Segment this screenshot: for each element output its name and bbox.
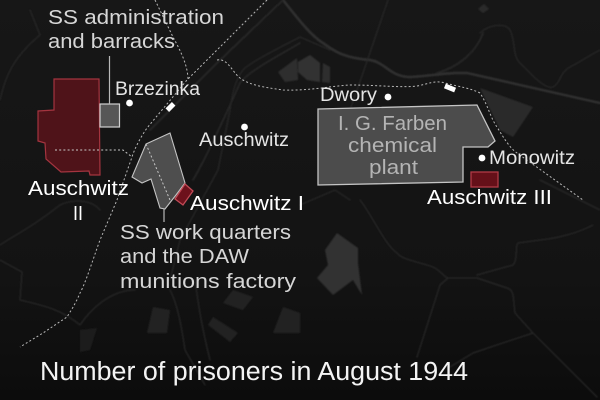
zone: I. G. Farben chemical plant xyxy=(318,105,495,185)
label: camp names: II xyxy=(73,202,83,225)
label: camp names: Auschwitz I xyxy=(190,192,304,215)
label: I. G. Farben chemical plant: I. G. Farben xyxy=(338,113,447,135)
town dots xyxy=(126,94,485,161)
label: town names: Brzezinka xyxy=(115,79,200,100)
label: SS work quarters and the DAW munitions factory: SS work quarters xyxy=(120,221,291,244)
label: SS work quarters and the DAW munitions factory xyxy=(120,221,297,293)
zone: SS work quarters xyxy=(132,133,185,209)
label: town names: Monowitz xyxy=(489,148,575,169)
leader line: SS work quarters xyxy=(163,209,165,222)
label: I. G. Farben chemical plant: plant xyxy=(369,157,418,179)
title: Number of prisoners in August 1944 xyxy=(40,358,468,386)
label: SS administration and barracks: and barracks xyxy=(48,30,175,53)
label: camp names: Auschwitz III xyxy=(427,186,552,209)
terrain patches xyxy=(80,4,533,352)
label: SS administration and barracks xyxy=(48,6,224,53)
railway station markers xyxy=(166,84,456,112)
label: SS administration and barracks: SS administration xyxy=(48,6,224,29)
label: SS work quarters and the DAW munitions factory: munitions factory xyxy=(120,270,297,293)
leader line: SS administration xyxy=(108,56,110,104)
label: SS work quarters and the DAW munitions factory: and the DAW xyxy=(120,245,250,268)
label: I. G. Farben chemical plant xyxy=(338,113,447,179)
label: town names: Auschwitz xyxy=(199,130,289,151)
label: town names xyxy=(115,79,575,169)
zone: SS administration and barracks xyxy=(100,104,120,127)
label: camp names: Auschwitz xyxy=(28,177,129,200)
zone: Auschwitz III camp xyxy=(471,172,498,187)
railway branches xyxy=(55,144,170,200)
zone: Auschwitz I camp xyxy=(175,184,193,205)
zone: Auschwitz II camp xyxy=(38,79,100,175)
label: I. G. Farben chemical plant: chemical xyxy=(348,135,437,157)
label: camp names xyxy=(28,177,552,225)
label: town names: Dwory xyxy=(320,85,378,106)
